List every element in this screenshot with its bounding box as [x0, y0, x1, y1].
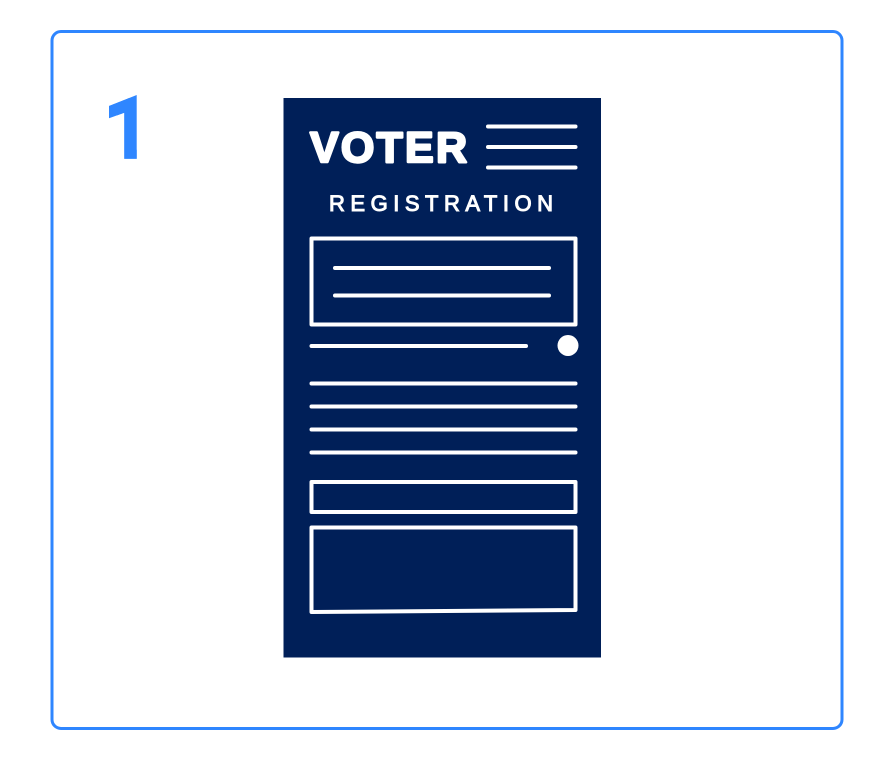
checkbox row — [312, 335, 578, 356]
heading: REGISTRATION: REGISTRATION — [329, 191, 553, 216]
voter registration form — [284, 98, 601, 658]
top field box — [312, 238, 576, 324]
signature box — [312, 528, 576, 612]
form background — [284, 98, 601, 658]
heading: VOTER: VOTER — [310, 124, 467, 172]
text lines — [312, 384, 576, 452]
step number 1: 1 — [96, 79, 146, 179]
small input box — [312, 482, 576, 512]
heading lines — [488, 126, 576, 168]
